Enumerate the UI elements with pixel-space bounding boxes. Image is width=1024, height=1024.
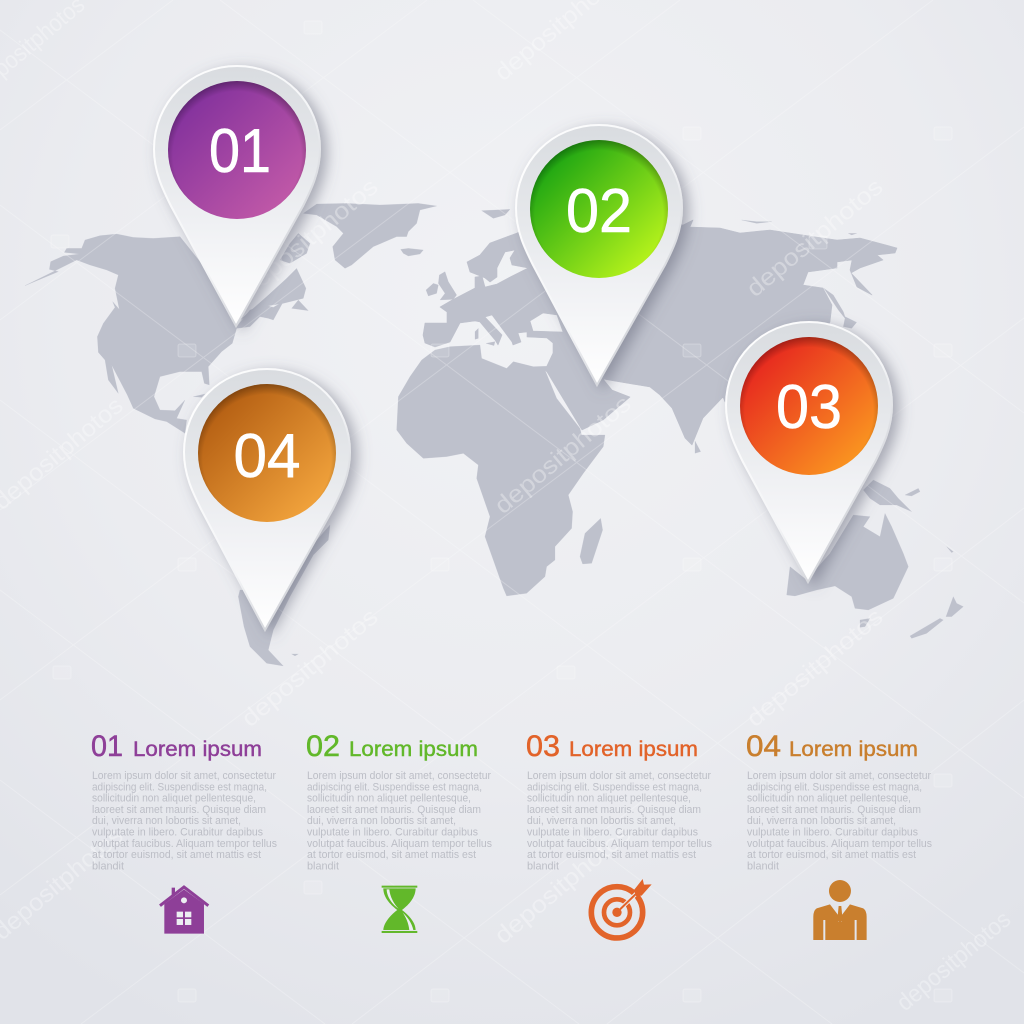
pin 04 xyxy=(184,369,350,630)
heading 02: Lorem ipsum xyxy=(349,738,478,761)
icon: house xyxy=(160,887,208,934)
body 03: blandit xyxy=(527,860,559,872)
body 04: adipiscing elit. Suspendisse est magna, xyxy=(747,781,922,793)
column 01 text xyxy=(91,730,280,872)
heading 01: Lorem ipsum xyxy=(133,738,262,761)
heading 03 xyxy=(526,730,698,763)
South America xyxy=(238,525,330,666)
body 04: dui, viverra non lobortis sit amet, xyxy=(747,815,896,827)
body 01: dui, viverra non lobortis sit amet, xyxy=(92,815,241,827)
heading 02 xyxy=(306,730,478,763)
body 02: sollicitudin non aliquet pellentesque, xyxy=(307,793,471,805)
heading 03: 03 xyxy=(526,730,560,763)
body 04: blandit xyxy=(747,860,779,872)
North America xyxy=(25,233,310,433)
body 04: at tortor euismod, sit amet mattis est xyxy=(747,849,916,861)
heading 04: 04 xyxy=(746,730,781,763)
pin 01: 01 xyxy=(209,117,271,186)
body 03: Lorem ipsum dolor sit amet, consectetur xyxy=(527,770,711,782)
body 02: Lorem ipsum dolor sit amet, consectetur xyxy=(307,770,491,782)
column 02 text xyxy=(306,730,495,872)
body 04: vulputate in libero. Curabitur dapibus xyxy=(747,826,919,838)
world map xyxy=(25,203,963,666)
pin 01 xyxy=(154,66,320,326)
body 03: volutpat faucibus. Aliquam tempor tellus xyxy=(527,838,713,850)
Eurasia xyxy=(423,210,897,445)
Africa xyxy=(397,345,605,596)
column 04 text xyxy=(746,730,935,872)
pin 02: 02 xyxy=(566,177,632,246)
body 01: laoreet sit amet mauris. Quisque diam xyxy=(92,804,266,816)
body 02: laoreet sit amet mauris. Quisque diam xyxy=(307,804,481,816)
body 01: sollicitudin non aliquet pellentesque, xyxy=(92,793,256,805)
body 04: Lorem ipsum dolor sit amet, consectetur xyxy=(747,770,931,782)
icon: hourglass xyxy=(382,886,417,933)
text: depositphotos xyxy=(892,906,1016,1017)
body 01: adipiscing elit. Suspendisse est magna, xyxy=(92,781,267,793)
heading 02: 02 xyxy=(306,730,340,763)
text: depositphotos xyxy=(742,173,888,303)
heading 04 xyxy=(746,730,918,763)
body 02: volutpat faucibus. Aliquam tempor tellus xyxy=(307,838,493,850)
body 02: dui, viverra non lobortis sit amet, xyxy=(307,815,456,827)
pin 04: 04 xyxy=(234,422,300,491)
body 01: at tortor euismod, sit amet mattis est xyxy=(92,849,261,861)
body 04: sollicitudin non aliquet pellentesque, xyxy=(747,793,911,805)
body 01: Lorem ipsum dolor sit amet, consectetur xyxy=(92,770,276,782)
body 03: dui, viverra non lobortis sit amet, xyxy=(527,815,676,827)
pin 03: 03 xyxy=(776,373,842,442)
body 03: laoreet sit amet mauris. Quisque diam xyxy=(527,804,701,816)
body 02: adipiscing elit. Suspendisse est magna, xyxy=(307,781,482,793)
body 02: vulputate in libero. Curabitur dapibus xyxy=(307,826,479,838)
body 03: adipiscing elit. Suspendisse est magna, xyxy=(527,781,702,793)
text: depositphotos xyxy=(742,603,888,733)
body 01: blandit xyxy=(92,860,124,872)
body 01: vulputate in libero. Curabitur dapibus xyxy=(92,826,264,838)
body 03: vulputate in libero. Curabitur dapibus xyxy=(527,826,699,838)
body 04: volutpat faucibus. Aliquam tempor tellus xyxy=(747,838,933,850)
text: depositphotos xyxy=(490,390,636,520)
heading 04: Lorem ipsum xyxy=(789,738,918,761)
heading 01 xyxy=(91,730,262,763)
icon: target with arrow xyxy=(591,879,652,938)
body 04: laoreet sit amet mauris. Quisque diam xyxy=(747,804,921,816)
text: depositphotos xyxy=(237,173,383,303)
European islands xyxy=(426,209,510,346)
icon: businessman xyxy=(813,880,867,940)
body 03: at tortor euismod, sit amet mattis est xyxy=(527,849,696,861)
body 02: blandit xyxy=(307,860,339,872)
Asian islands xyxy=(695,220,857,453)
heading 03: Lorem ipsum xyxy=(569,738,698,761)
pin 03 xyxy=(726,322,892,582)
column 03 text xyxy=(526,730,715,872)
pin 02 xyxy=(516,125,682,385)
Greenland and Iceland xyxy=(303,203,437,268)
text: depositphotos xyxy=(490,820,636,950)
Oceania xyxy=(787,480,963,638)
heading 01: 01 xyxy=(91,730,123,763)
text: depositphotos xyxy=(237,603,383,733)
body 02: at tortor euismod, sit amet mattis est xyxy=(307,849,476,861)
body 03: sollicitudin non aliquet pellentesque, xyxy=(527,793,691,805)
body 01: volutpat faucibus. Aliquam tempor tellus xyxy=(92,838,278,850)
